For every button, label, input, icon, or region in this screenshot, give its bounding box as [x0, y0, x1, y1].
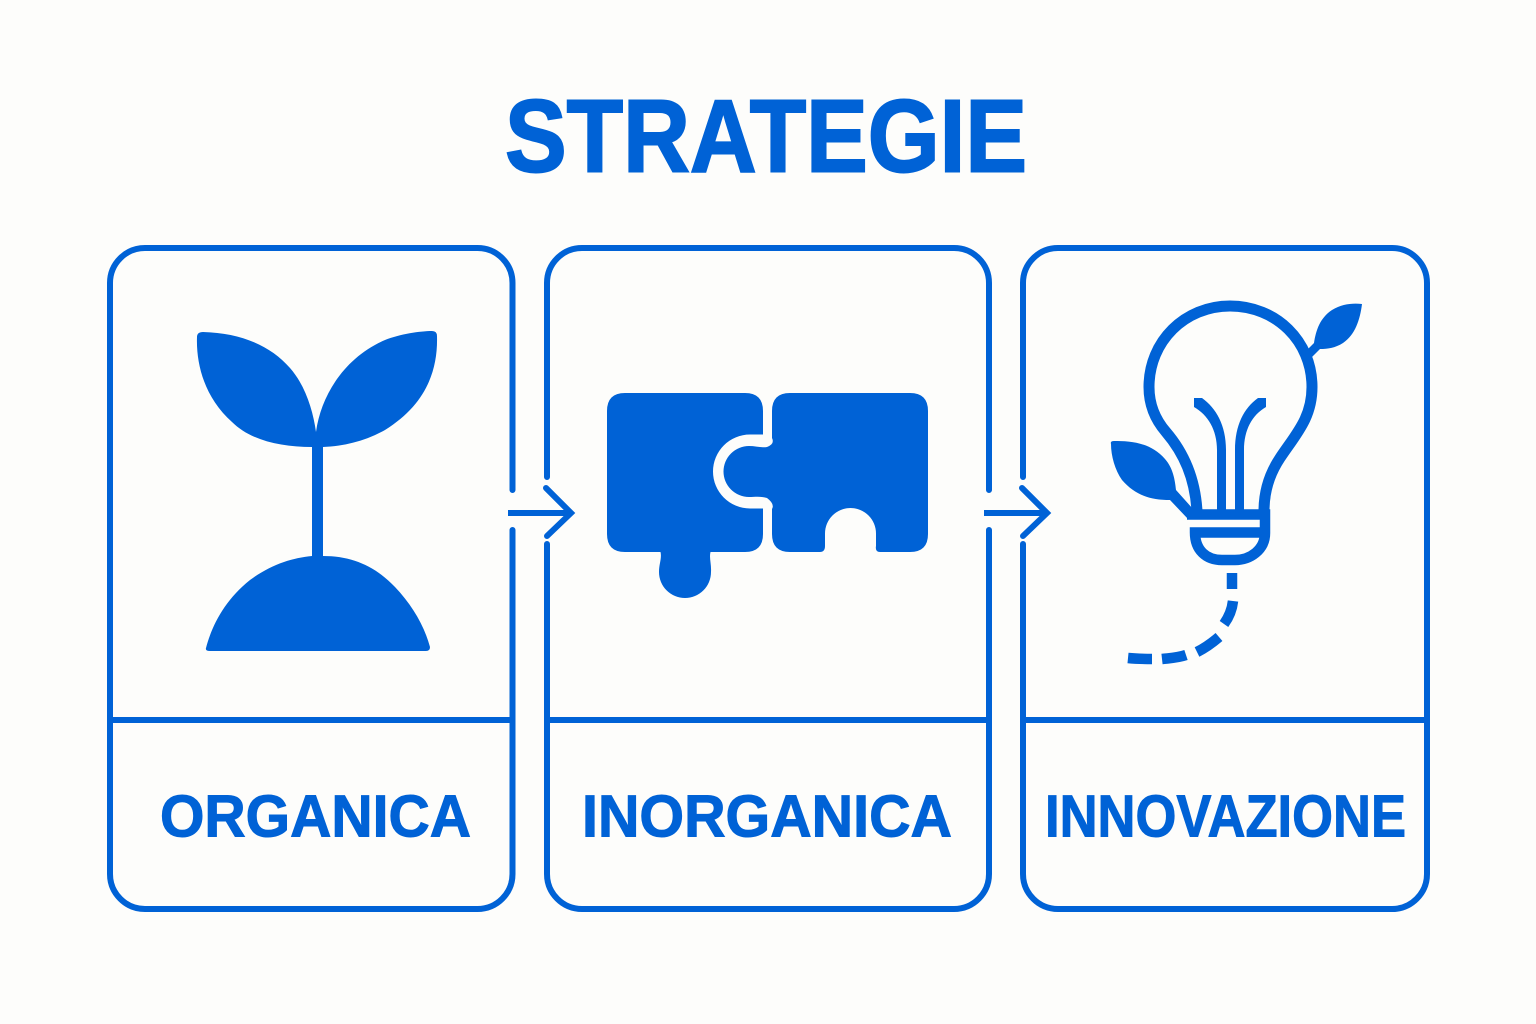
- leaf left: [1111, 441, 1193, 519]
- panel: inorganica: [547, 248, 989, 909]
- arrow: inorganica to innovazione: [984, 488, 1047, 536]
- label: inorganica: INORGANICA: [582, 784, 952, 850]
- icon: sprout: [197, 331, 437, 651]
- label: organica: ORGANICA: [160, 784, 471, 850]
- icon: light bulb with leaves: [1111, 304, 1362, 659]
- puzzle piece left: [607, 393, 763, 598]
- leaf right: [1307, 304, 1362, 358]
- puzzle piece right: [724, 393, 928, 552]
- base: [1187, 514, 1265, 560]
- panel: innovazione: [1023, 248, 1427, 909]
- panel: organica: [110, 248, 512, 909]
- label: innovazione: INNOVAZIONE: [1045, 784, 1406, 850]
- divider: [110, 717, 512, 723]
- title: STRATEGIE: [505, 78, 1027, 194]
- divider: [547, 717, 989, 723]
- divider: [1023, 717, 1427, 723]
- icon: puzzle: [607, 393, 928, 598]
- arrow: organica to inorganica: [508, 488, 571, 536]
- card outline: [110, 248, 512, 909]
- filament wires: [1194, 398, 1266, 512]
- dashed trail: [1128, 573, 1233, 659]
- card outline: [1023, 248, 1427, 909]
- card outline: [547, 248, 989, 909]
- bulb glass: [1149, 306, 1312, 511]
